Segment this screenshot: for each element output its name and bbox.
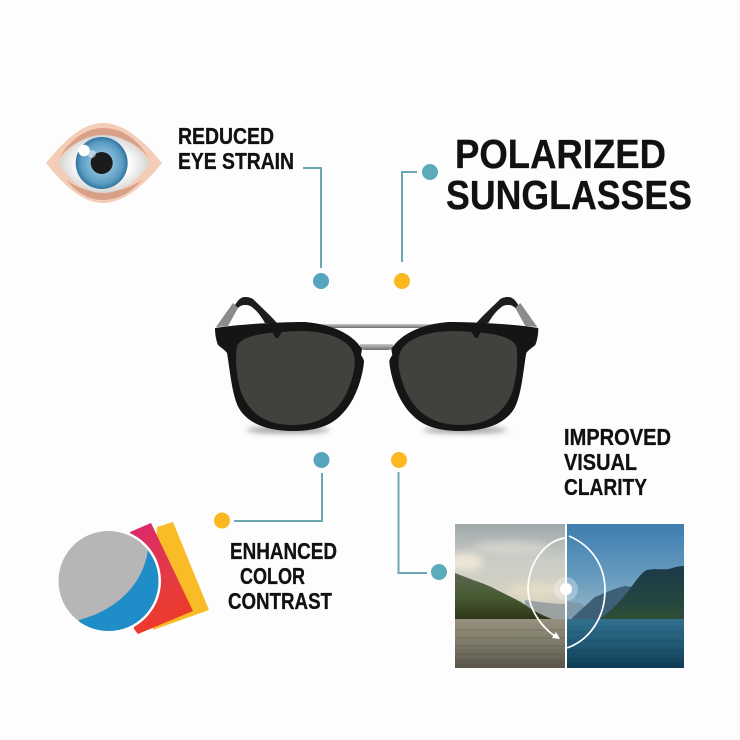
title: POLARIZED — [455, 131, 666, 177]
label: improved visual clarity: CLARITY — [564, 474, 647, 500]
icon: color contrast — [58, 522, 209, 634]
label: reduced eye strain — [178, 123, 294, 174]
label: reduced eye strain: REDUCED — [178, 123, 274, 149]
label: improved visual clarity: IMPROVED — [564, 424, 671, 450]
connector: color contrast — [214, 452, 330, 528]
left half — [215, 297, 364, 431]
label: enhanced color contrast: COLOR — [240, 563, 305, 589]
title — [446, 131, 692, 218]
sunglasses — [215, 297, 538, 433]
connector: title to glasses — [394, 164, 438, 289]
center point — [554, 577, 578, 601]
label: enhanced color contrast: ENHANCED — [230, 538, 337, 564]
circular arrow — [528, 538, 565, 638]
label: improved visual clarity — [564, 424, 671, 500]
label: enhanced color contrast: CONTRAST — [228, 588, 332, 614]
left half: without polarization — [447, 524, 565, 668]
right half: with polarization — [567, 524, 684, 619]
label: enhanced color contrast — [228, 538, 337, 614]
connector: eye strain to glasses — [303, 168, 329, 289]
photo comparison — [447, 524, 684, 668]
label: reduced eye strain: EYE STRAIN — [178, 148, 294, 174]
connector: visual clarity — [391, 452, 447, 580]
icon: eye — [46, 123, 162, 203]
label: improved visual clarity: VISUAL — [564, 449, 637, 475]
right half — [389, 297, 538, 431]
title: SUNGLASSES — [446, 172, 692, 218]
divider — [565, 524, 567, 668]
